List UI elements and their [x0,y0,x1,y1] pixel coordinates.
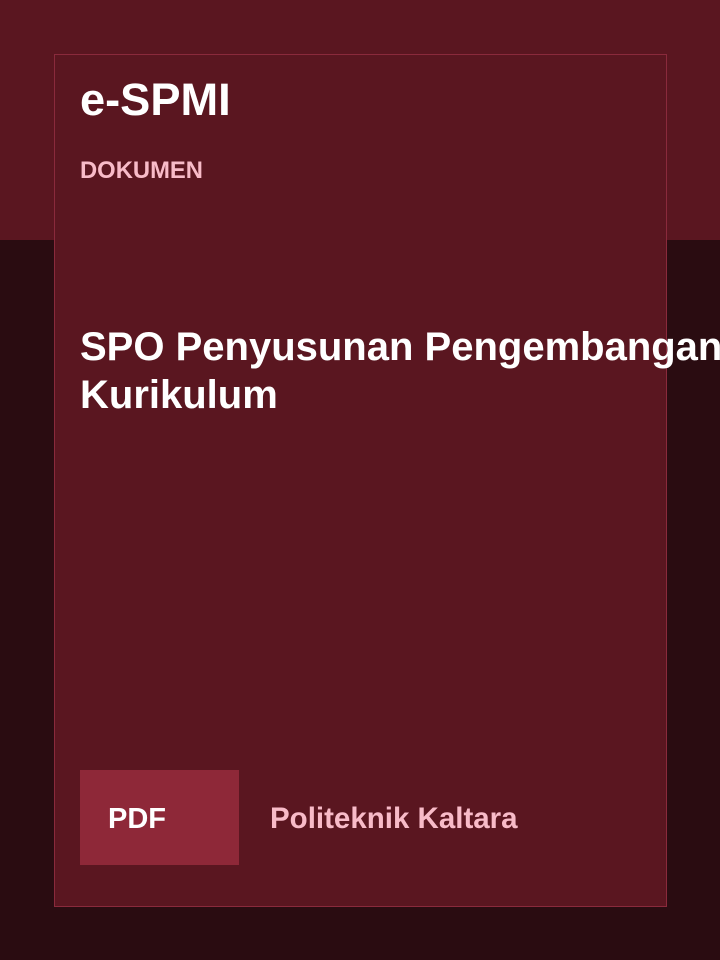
header band [0,0,720,240]
badge: PDF [80,770,239,865]
document title: Kurikulum [80,373,278,417]
category label: DOKUMEN [80,157,203,184]
document title [80,325,720,417]
brand title: e-SPMI [80,74,231,125]
institution name: Politeknik Kaltara [270,802,518,835]
document title: SPO Penyusunan Pengembangan [80,325,720,369]
panel: document card [54,54,667,907]
badge label: PDF [108,803,166,835]
